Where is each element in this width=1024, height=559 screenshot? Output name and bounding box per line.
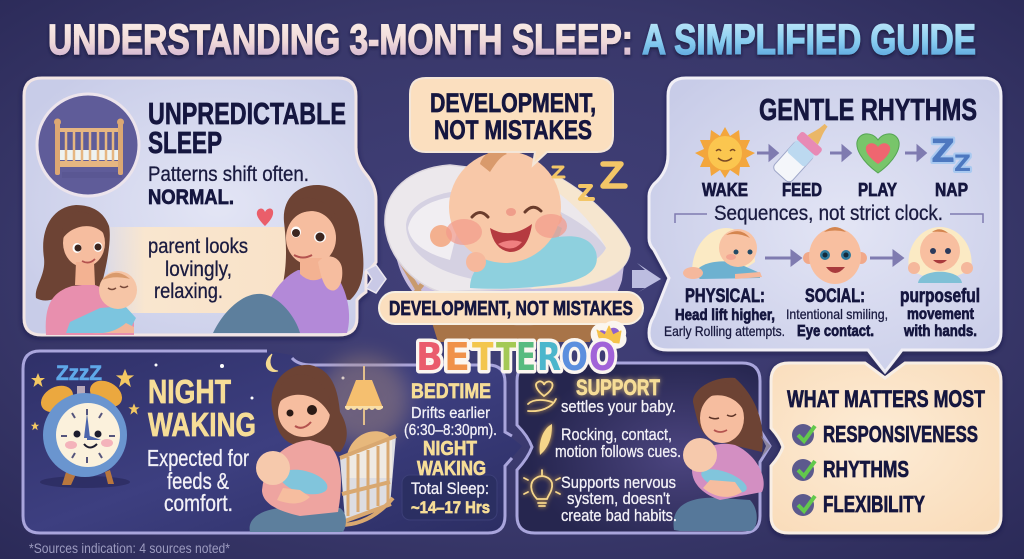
logo: Betteroo: T [472,335,496,379]
text block: Expected for [147,445,249,471]
icon: crib in circle [37,94,139,196]
text block: milestones: PHYSICAL: [685,286,765,307]
arrow [632,263,661,293]
caption pill: DEVELOPMENT, NOT MISTAKES [389,298,633,320]
item: rhythms [792,456,909,482]
logo: Betteroo: O [589,335,616,379]
arrow [870,252,902,264]
text block [555,397,681,525]
item: flexibility [792,491,925,517]
text block [147,445,249,516]
logo: Betteroo [416,324,623,379]
text block: milestones: SOCIAL: [805,286,865,307]
heading: SUPPORT [576,375,660,400]
icon: nap z's: Z [931,132,955,170]
text block: milestones: with hands. [903,323,977,340]
text block: create bad habits. [561,506,677,525]
logo crown [594,324,623,345]
heading [148,96,346,160]
text block: Patterns shift often. [148,163,309,186]
panel: night waking [23,351,522,533]
text block: bedtime: NIGHT [423,438,477,460]
footnote: *Sources indication: 4 sources noted* [29,540,230,556]
arrow [366,265,386,293]
text block: milestones: Intentional smiling, [786,306,888,322]
text block: bedtime: BEDTIME [411,380,491,403]
text block: system, doesn't [567,489,670,508]
icon: nap z's [931,132,971,177]
text block: bedtime: Drifts earlier [411,405,491,422]
panel: development, not mistakes [379,78,643,342]
text block: motion follows cues. [555,442,681,461]
illustration: nursing parent [250,365,347,532]
text block: milestones: movement [907,306,975,323]
labels [702,180,968,200]
icon: sun [695,127,755,178]
item: rhythms: RHYTHMS [823,456,909,482]
illustration: parent holding baby [36,205,137,335]
icon: sleeping z's [553,164,625,199]
labels: FEED [782,180,822,200]
total sleep box: WAKING [417,458,486,480]
arrow [757,147,777,159]
text block: milestones: Early Rolling attempts. [664,323,785,339]
text block: bedtime [404,380,497,460]
icon: moon [266,354,278,371]
illustration: parent soothing baby [673,378,764,531]
heading: NIGHT [148,373,231,410]
text block: milestones: Head lift higher, [675,307,775,324]
icon: hand with heart [528,381,556,411]
panel: unpredictable sleep [24,78,386,335]
total sleep box: ~14–17 Hrs [411,498,490,517]
arrow [761,436,771,458]
arrow [830,147,850,159]
icon: nap z's: Z [954,152,971,177]
panel: gentle rhythms [632,78,1001,372]
labels: WAKE [702,180,748,200]
caption: Sequences, not strict clock. [714,202,943,225]
logo: Betteroo: R [537,335,561,379]
text block: milestones: Eye contact. [797,323,874,340]
illustration: social baby [803,227,867,284]
labels: NAP [935,180,968,200]
logo: Betteroo: B [416,335,443,379]
caption pill [379,292,643,324]
panel: what matters most [771,363,1001,533]
text block: parent looks [148,235,248,258]
illustration: baby in bassinet [385,151,630,342]
text block: settles your baby. [561,397,676,416]
illustration: hands baby [908,227,973,283]
arrow [905,147,925,159]
illustration: physical baby [683,228,762,279]
icon: heart [857,134,899,173]
heading: WAKING [148,406,256,443]
text block: relaxing. [154,280,223,303]
labels: PLAY [858,180,897,200]
speech bubble: DEVELOPMENT, [430,88,596,118]
heading [148,373,256,443]
heading: SUPPORT [576,375,660,400]
logo: Betteroo: O [561,335,588,379]
total sleep box [402,458,497,520]
text block: Rocking, contact, [561,425,672,444]
cream text band [108,227,293,313]
logo: Betteroo: E [444,335,470,379]
icon: alarm clock [36,362,130,488]
text block: Supports nervous [561,473,676,492]
heading: UNPREDICTABLE [148,96,346,131]
text block: lovingly, [165,258,232,281]
text block: milestones: purposeful [900,286,980,307]
logo: Betteroo: E [516,335,536,379]
text block: milestones [664,286,980,340]
text block: comfort. [164,490,233,516]
title: UNDERSTANDING 3-MONTH SLEEP: [48,16,633,64]
zzz: ZzzZ [56,362,102,385]
icon: heart [257,208,273,226]
total sleep box: Total Sleep: [411,479,489,498]
text block: NORMAL. [148,186,234,209]
logo: Betteroo: T [496,335,517,379]
illustration: relaxing parent [213,185,363,333]
speech bubble: NOT MISTAKES [434,115,592,145]
illustration: lamp and crib [319,355,409,525]
text block [148,163,309,303]
arrow [765,252,800,264]
icon: light bulb [524,470,560,506]
text block: bedtime: (6:30–8:30pm). [404,422,497,439]
speech bubble [410,78,613,165]
item: responsiveness [792,421,978,447]
panel: support [517,363,771,533]
item: flexibility: FLEXIBILITY [823,491,925,517]
text block: feeds & [167,468,229,494]
heading: SLEEP [148,125,222,160]
icon: bottle [770,116,836,185]
icon: feather [540,424,552,455]
stars [31,364,345,430]
